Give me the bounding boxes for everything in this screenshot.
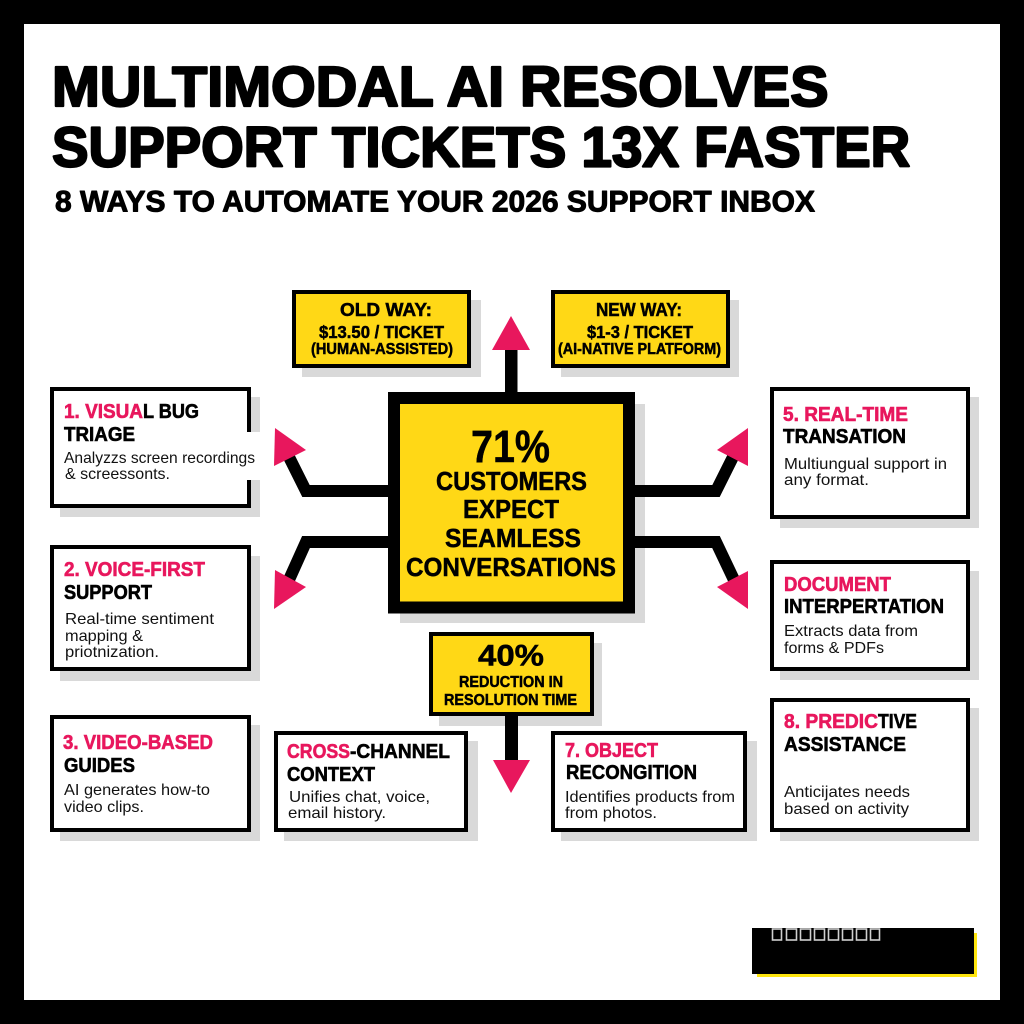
footer badge with placeholder glyphs (752, 928, 977, 977)
panel: old way cost: $13.50 / TICKET (319, 322, 444, 342)
card 6: document interpretation: INTERPERTATION (784, 596, 944, 618)
card 3: video-based guides: GUIDES (64, 755, 135, 777)
card 8: predictive assistance: TIVE (878, 711, 917, 733)
panel: central stat: 71% (471, 421, 550, 472)
panel: central stat: CUSTOMERS (436, 466, 587, 496)
panel: old way cost: (HUMAN-ASSISTED) (311, 341, 453, 358)
title: MULTIMODAL AI RESOLVES (52, 55, 829, 119)
card 8: predictive assistance: based on activity (784, 801, 909, 818)
card 4: cross-channel context: email history. (288, 805, 386, 822)
panel: new way cost (553, 292, 739, 377)
panel: old way cost: OLD WAY: (340, 300, 432, 320)
card 5: real-time translation: Multiungual support in (784, 456, 947, 473)
card 4: cross-channel context: -CHANNEL (350, 741, 450, 763)
card 4: cross-channel context: CONTEXT (287, 764, 375, 786)
card 1: visual bug triage: & screessonts. (65, 466, 170, 483)
panel: reduction stat: RESOLUTION TIME (444, 692, 577, 709)
panel: new way cost: (AI-NATIVE PLATFORM) (558, 341, 721, 358)
card 5: real-time translation: any format. (784, 472, 869, 489)
card 4: cross-channel context: Unifies chat, voice, (289, 789, 430, 806)
card 2: voice-first support: 2. VOICE-FIRST (64, 559, 205, 581)
card 2: voice-first support: SUPPORT (64, 582, 152, 604)
card 8: predictive assistance (772, 700, 979, 841)
subtitle: 8 WAYS TO AUTOMATE YOUR 2026 SUPPORT INBOX (55, 186, 815, 218)
card 1: visual bug triage: Analyzzs screen recordings (64, 450, 255, 467)
title (52, 55, 910, 179)
arrow: to card 5 (633, 428, 748, 491)
card 6: document interpretation: DOCUMENT (784, 574, 891, 596)
card 7: object recognition: RECONGITION (566, 762, 697, 784)
card 2: voice-first support: Real-time sentiment (65, 611, 215, 628)
card 7: object recognition: 7. OBJECT (565, 740, 658, 762)
card 1: visual bug triage (52, 389, 261, 517)
card 4: cross-channel context: CROSS (287, 741, 350, 763)
title: SUPPORT TICKETS 13X FASTER (52, 116, 910, 179)
arrow: up from center (492, 316, 530, 394)
panel: old way cost (294, 292, 481, 377)
card 7: object recognition: from photos. (565, 805, 657, 822)
panel: central stat: CONVERSATIONS (406, 552, 616, 582)
card 5: real-time translation (772, 389, 979, 528)
panel: central stat: EXPECT (463, 494, 559, 524)
card 6: document interpretation (772, 562, 979, 680)
card 1: visual bug triage: 1. VISUA (64, 401, 143, 423)
card 3: video-based guides: AI generates how-to (64, 782, 210, 799)
panel: central stat: SEAMLESS (445, 523, 581, 553)
arrow: to card 2 (274, 542, 390, 609)
arrow: to card 6 (633, 542, 748, 609)
card 8: predictive assistance: 8. PREDIC (784, 711, 878, 733)
panel: reduction stat: REDUCTION IN (459, 674, 563, 691)
panel: reduction stat: 40% (478, 640, 544, 672)
card 5: real-time translation: TRANSATION (783, 426, 906, 448)
panel: reduction stat (431, 634, 602, 726)
card 7: object recognition: Identifies products from (565, 789, 735, 806)
card 4: cross-channel context (276, 733, 478, 841)
card 3: video-based guides (52, 717, 260, 841)
card 2: voice-first support (52, 547, 260, 681)
card 3: video-based guides: video clips. (64, 799, 144, 816)
arrow: to card 1 (274, 428, 390, 491)
panel: central stat (394, 398, 645, 623)
card 8: predictive assistance: ASSISTANCE (784, 734, 906, 756)
card 5: real-time translation: 5. REAL-TIME (783, 404, 908, 426)
card 7: object recognition (553, 733, 757, 841)
panel: new way cost: $1-3 / TICKET (587, 322, 693, 342)
card 3: video-based guides: 3. VIDEO-BASED (63, 732, 213, 754)
arrow: down from reduction stat (493, 714, 530, 793)
card 1: visual bug triage: TRIAGE (64, 424, 135, 446)
card 6: document interpretation: forms & PDFs (784, 640, 884, 657)
card 6: document interpretation: Extracts data from (784, 623, 918, 640)
card 8: predictive assistance: Anticijates needs (784, 784, 910, 801)
card 2: voice-first support: mapping & (65, 628, 143, 645)
card 2: voice-first support: priotnization. (65, 644, 159, 661)
card 1: visual bug triage: L BUG (143, 401, 199, 423)
panel: new way cost: NEW WAY: (596, 300, 682, 320)
